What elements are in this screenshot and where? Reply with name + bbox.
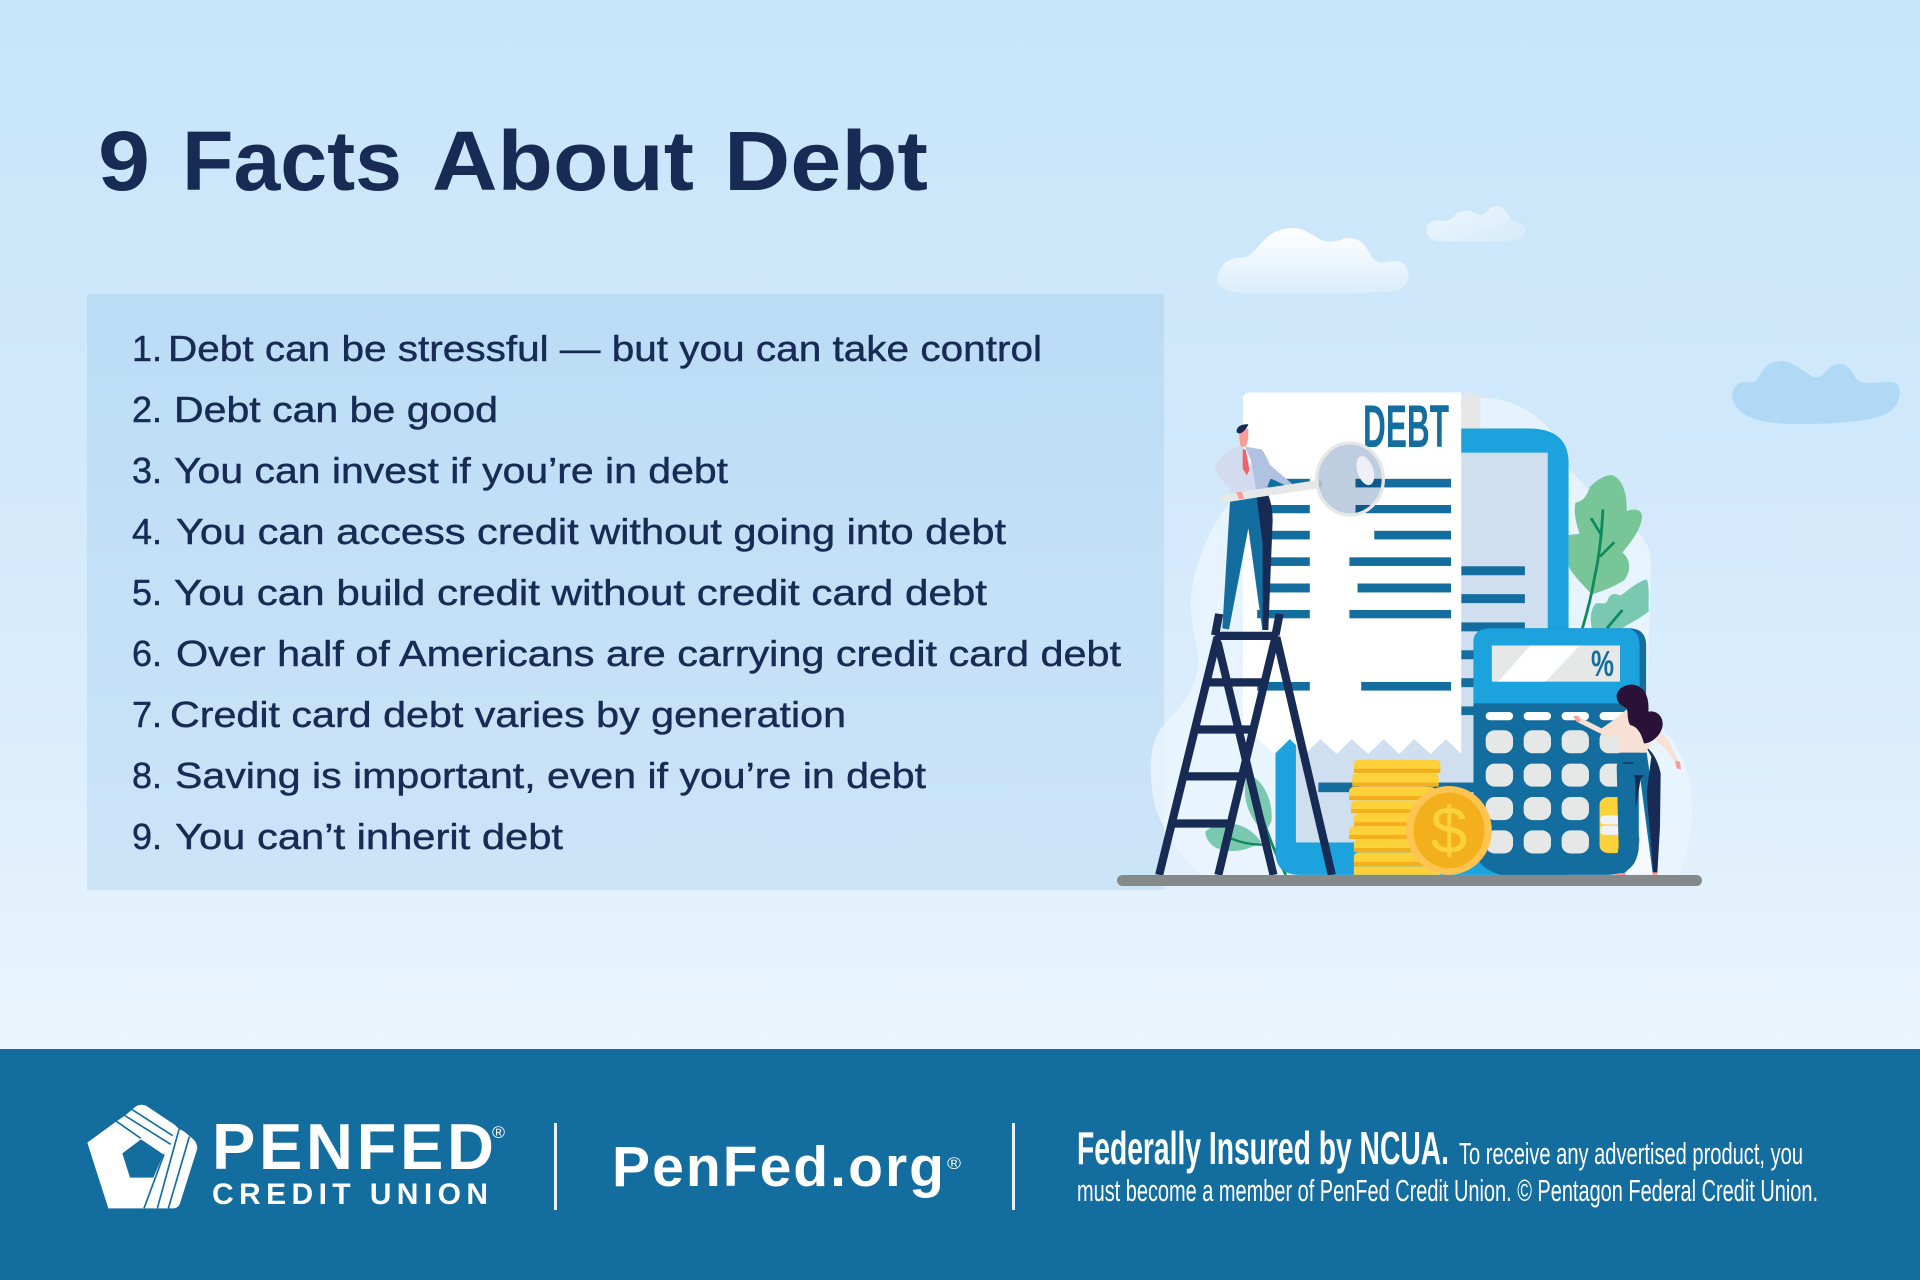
phone body (1276, 429, 1569, 875)
illustration: debt receipt scene (1117, 392, 1702, 886)
title: About (432, 114, 694, 208)
woman's trouser shade (1646, 747, 1661, 873)
fact 3: You can invest if you’re in debt (174, 450, 728, 491)
cloud: small white (1426, 206, 1525, 242)
ladder (1159, 614, 1332, 875)
brand name: PENFED (212, 1110, 494, 1183)
divider (554, 1123, 557, 1210)
magnifier lens (1317, 443, 1383, 515)
percent sign: % (1591, 643, 1614, 684)
plant: right leaves (1569, 475, 1649, 628)
gap between legs (1627, 777, 1653, 873)
fact 1: 1. (132, 328, 162, 369)
phone screen (1296, 453, 1548, 842)
belt detail (1623, 762, 1644, 808)
registered mark: ® (492, 1123, 505, 1142)
backdrop blob (1151, 398, 1692, 875)
tie (1243, 449, 1249, 475)
website: PenFed.org (612, 1135, 944, 1199)
man's trouser shadow (1257, 495, 1273, 630)
fact 8: Saving is important, even if you’re in debt (175, 755, 926, 796)
title: Facts (182, 114, 402, 208)
cloud: large white (1217, 228, 1409, 294)
woman's trousers (1614, 753, 1657, 873)
panel: fact list (87, 294, 1164, 890)
DEBT heading on receipt: DEBT (1363, 393, 1449, 460)
coin stack (1349, 760, 1440, 875)
woman's feet (1614, 872, 1657, 875)
man's shirt (1214, 446, 1257, 502)
fact 1: Debt can be stressful — but you can take control (168, 328, 1042, 369)
magnifier rim (1317, 443, 1383, 515)
fact 2: Debt can be good (174, 389, 498, 430)
receipt roll (1461, 392, 1480, 429)
receipt lines (1257, 479, 1451, 691)
fact 7: 7. (132, 694, 162, 735)
fact 8: 8. (132, 755, 162, 796)
disclosure text (1077, 1122, 1818, 1208)
brand subtitle: CREDIT UNION (212, 1178, 488, 1211)
title: 9 (98, 114, 150, 208)
footer band (0, 1049, 1920, 1280)
fact 9: 9. (132, 816, 162, 857)
fact 4: You can access credit without going into debt (176, 511, 1006, 552)
magnifier handle (1223, 484, 1318, 499)
fact 6: 6. (132, 633, 162, 674)
man's head (1239, 428, 1248, 447)
fact 3: 3. (132, 450, 162, 491)
fact 2: 2. (132, 389, 162, 430)
man's shirt shade (1245, 447, 1292, 497)
dollar sign: $ (1431, 793, 1467, 867)
ground bar (1117, 875, 1702, 886)
title: Debt (724, 114, 928, 208)
fact 6: Over half of Americans are carrying credit card debt (176, 633, 1121, 674)
man's hand (1236, 492, 1244, 499)
fact 9: You can’t inherit debt (175, 816, 563, 857)
calculator (1473, 628, 1646, 875)
woman's hair (1617, 685, 1663, 743)
logo: PenFed pentagon (87, 1105, 197, 1208)
fact 5: 5. (132, 572, 162, 613)
man's trousers (1222, 495, 1268, 630)
clouds (1217, 206, 1900, 424)
woman's hands (1573, 716, 1681, 769)
man's hair (1237, 424, 1248, 434)
phone screen lines (1318, 566, 1525, 792)
receipt paper (1243, 392, 1461, 754)
fact 4: 4. (132, 511, 162, 552)
title (98, 114, 928, 208)
disclosure bold: Federally Insured by NCUA. (1077, 1122, 1449, 1174)
divider (1012, 1123, 1015, 1210)
fact 5: You can build credit without credit card debt (174, 572, 987, 613)
website registered mark: ® (947, 1154, 962, 1173)
man with magnifier (1214, 424, 1383, 630)
woman at calculator (1573, 685, 1681, 875)
fact 7: Credit card debt varies by generation (170, 694, 846, 735)
cloud: blue (1732, 361, 1900, 424)
woman's arms and torso (1577, 709, 1678, 762)
lens highlight (1353, 454, 1378, 487)
gold coin (1406, 786, 1492, 875)
panel background (87, 294, 1164, 890)
leaf: lower left (1205, 773, 1286, 875)
